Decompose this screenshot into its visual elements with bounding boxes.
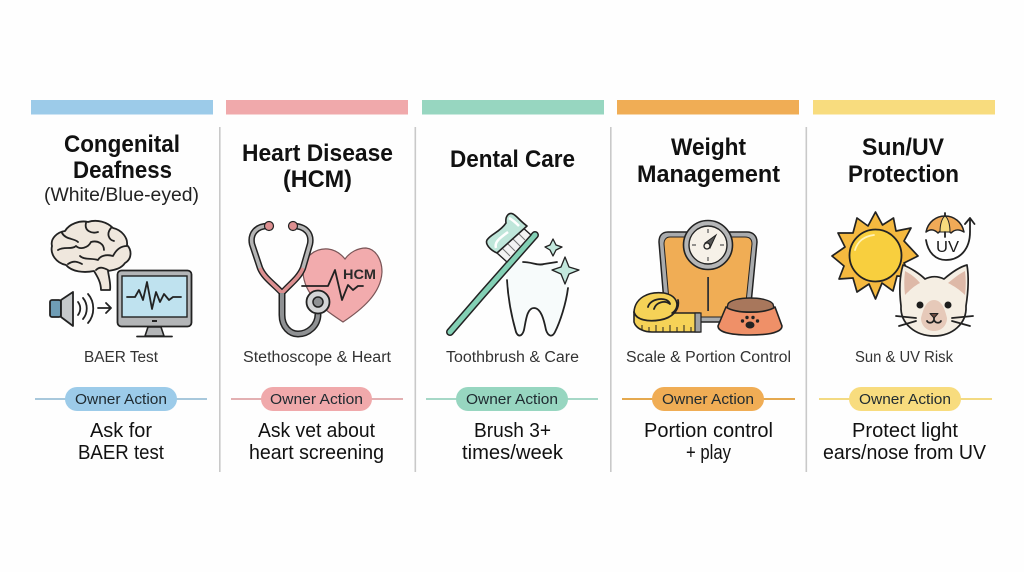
icon: sparkles	[545, 239, 579, 284]
owner action pill: Owner Action	[662, 392, 754, 408]
heading: heart disease: (HCM)	[283, 166, 352, 193]
heading: sun UV protection	[848, 134, 959, 188]
caption: sun and UV risk: Sun & UV Risk	[855, 349, 953, 366]
action text	[644, 420, 773, 464]
caption: BAER test: BAER Test	[84, 349, 159, 366]
panel: congenital deafness	[31, 100, 213, 464]
icon: bathroom scale	[659, 220, 757, 322]
heading: congenital deafness: Congenital	[64, 131, 180, 158]
icon: BAER monitor	[118, 270, 192, 336]
color bar: blue	[31, 100, 213, 114]
color bar: teal	[422, 100, 604, 114]
action text: + play	[686, 442, 731, 464]
panel: heart disease	[226, 100, 408, 464]
panel: sun and UV protection	[813, 100, 995, 464]
owner action pill: Owner Action	[75, 392, 167, 408]
action text	[462, 420, 564, 464]
icon: heart with HCM	[302, 248, 382, 322]
icon: tooth	[507, 262, 569, 336]
action text: Portion control	[644, 420, 773, 442]
icon: umbrella and UV arrow: UV	[936, 239, 960, 256]
color bar: pink	[226, 100, 408, 114]
owner action pill: Owner Action	[466, 392, 558, 408]
owner action pill	[231, 387, 403, 411]
action text: times/week	[462, 442, 564, 464]
caption: scale and portion control: Scale & Portion Control	[626, 349, 791, 366]
heading: dental care: Dental Care	[450, 146, 575, 173]
owner action pill	[819, 387, 992, 411]
heading: sun UV protection: Protection	[848, 161, 959, 188]
action text: ears/nose from UV	[823, 442, 987, 464]
icon: measuring tape	[634, 293, 701, 332]
action text	[823, 420, 987, 464]
panel: weight management	[617, 100, 799, 464]
action text	[78, 420, 164, 464]
owner action pill	[35, 387, 207, 411]
action text: Ask for	[90, 420, 152, 442]
icon: speaker with sound waves	[50, 292, 111, 326]
caption: stethoscope and heart: Stethoscope & Heart	[243, 349, 392, 366]
heading: heart disease: Heart Disease	[242, 140, 393, 167]
heading: heart disease	[242, 140, 393, 193]
owner action pill: Owner Action	[859, 392, 951, 408]
caption: toothbrush and care: Toothbrush & Care	[446, 349, 579, 366]
action text: BAER test	[78, 442, 164, 464]
icon: stethoscope	[252, 222, 330, 334]
owner action pill: Owner Action	[270, 392, 363, 408]
action text: Protect light	[852, 420, 958, 442]
heading: congenital deafness	[44, 131, 199, 206]
action text	[249, 420, 384, 464]
owner action pill	[622, 387, 795, 411]
heading: sun UV protection: Sun/UV	[862, 134, 945, 161]
heading: weight management: Weight	[671, 134, 746, 161]
color bar: orange	[617, 100, 799, 114]
icon: cat face	[896, 265, 973, 336]
icon: heart with HCM: HCM	[343, 267, 376, 282]
icon: food bowl with paw	[718, 298, 782, 335]
icon: sun	[832, 212, 918, 299]
heading: congenital deafness: Deafness	[73, 157, 172, 184]
owner action pill	[426, 387, 598, 411]
icon: toothbrush	[450, 213, 535, 332]
action text: Brush 3+	[474, 420, 551, 442]
action text: Ask vet about	[258, 420, 375, 442]
color bar: yellow	[813, 100, 995, 114]
heading: weight management	[637, 134, 780, 188]
icon: umbrella and UV arrow	[926, 213, 974, 260]
panel: dental care	[422, 100, 604, 464]
action text: heart screening	[249, 442, 384, 464]
heading: weight management: Management	[637, 161, 780, 188]
heading: congenital deafness: (White/Blue-eyed)	[44, 185, 199, 206]
icon: brain	[52, 221, 131, 290]
